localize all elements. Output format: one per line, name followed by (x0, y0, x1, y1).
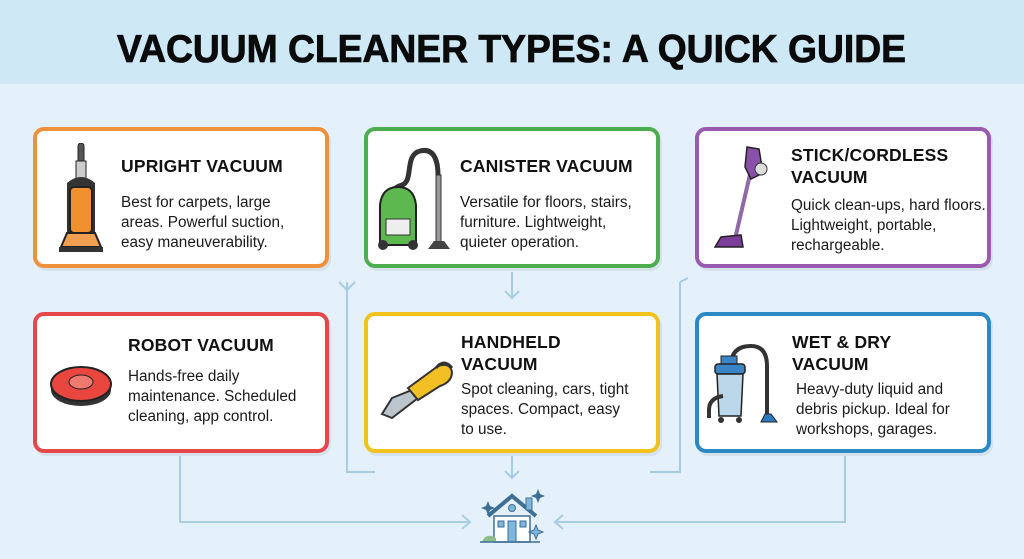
card: handheld vacuum: HANDHELD (461, 332, 561, 352)
card: wet & dry vacuum: Heavy-duty liquid and (796, 381, 943, 398)
icon: stick vacuum (714, 146, 768, 248)
card: robot vacuum: Hands-free daily (128, 368, 239, 385)
card: wet & dry vacuum (695, 312, 991, 453)
card: upright vacuum: Best for carpets, large (121, 194, 271, 211)
card: stick/cordless vacuum: rechargeable. (791, 237, 885, 254)
card: upright vacuum: areas. Powerful suction, (121, 214, 284, 231)
card: canister vacuum: furniture. Lightweight, (460, 214, 606, 231)
card: canister vacuum (364, 127, 660, 268)
card: robot vacuum: cleaning, app control. (128, 408, 273, 425)
card: handheld vacuum (364, 312, 660, 453)
card: upright vacuum: easy maneuverability. (121, 234, 268, 251)
card: wet & dry vacuum: VACUUM (792, 354, 869, 374)
icon: upright vacuum (59, 143, 103, 252)
card: robot vacuum: ROBOT VACUUM (128, 335, 274, 355)
icon: handheld vacuum (380, 362, 454, 420)
card: robot vacuum (33, 312, 329, 453)
card: canister vacuum: CANISTER VACUUM (460, 156, 633, 176)
icon: wet & dry vacuum (707, 344, 778, 423)
card: upright vacuum: UPRIGHT VACUUM (121, 156, 283, 176)
header band (0, 0, 1024, 84)
icon: canister vacuum (378, 148, 450, 250)
card: handheld vacuum: to use. (461, 421, 507, 438)
icon: robot vacuum (50, 366, 112, 406)
card: wet & dry vacuum: debris pickup. Ideal for (796, 401, 950, 418)
card: stick/cordless vacuum: Quick clean-ups, hard floors. (791, 197, 986, 214)
card: wet & dry vacuum: WET & DRY (792, 332, 891, 352)
card: stick/cordless vacuum: Lightweight, portable, (791, 217, 936, 234)
card: upright vacuum (33, 127, 329, 268)
card: stick/cordless vacuum: VACUUM (791, 167, 868, 187)
card: handheld vacuum: VACUUM (461, 354, 538, 374)
card: stick/cordless vacuum (695, 127, 991, 268)
card: wet & dry vacuum: workshops, garages. (796, 421, 937, 438)
card: canister vacuum: quieter operation. (460, 234, 579, 251)
card: canister vacuum: Versatile for floors, stairs, (460, 194, 632, 211)
icon: clean house (480, 489, 545, 543)
card: stick/cordless vacuum: STICK/CORDLESS (791, 145, 948, 165)
card: robot vacuum: maintenance. Scheduled (128, 388, 296, 405)
card: handheld vacuum: Spot cleaning, cars, tight (461, 381, 629, 398)
card: handheld vacuum: spaces. Compact, easy (461, 401, 620, 418)
title: VACUUM CLEANER TYPES: A QUICK GUIDE (117, 28, 906, 71)
